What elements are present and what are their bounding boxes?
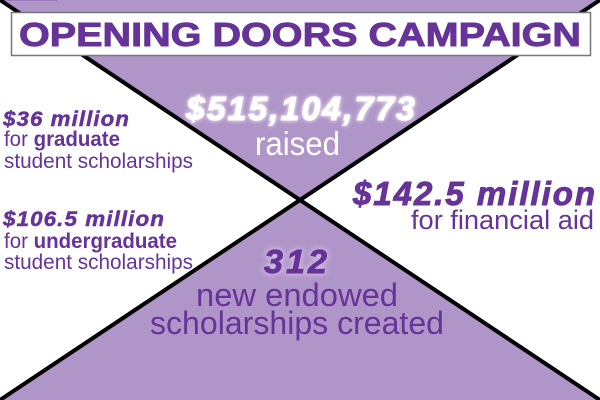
endowed scholarships: scholarships created (150, 305, 444, 341)
panel: top triangle (0, 0, 600, 200)
endowed scholarships: new endowed (196, 277, 398, 313)
graduate scholarships: for graduate (4, 128, 120, 151)
undergraduate scholarships: for undergraduate (4, 230, 177, 253)
endowed scholarships (150, 243, 444, 341)
total raised (185, 90, 417, 162)
graduate scholarships: $36 million (2, 108, 130, 131)
undergraduate scholarships (2, 208, 193, 274)
undergraduate scholarships: $106.5 million (2, 208, 165, 231)
graduate scholarships (2, 108, 193, 173)
endowed scholarships: 312 (264, 243, 330, 280)
financial aid: for financial aid (411, 205, 594, 235)
total raised: $515,104,773 (185, 90, 417, 127)
panel: bottom triangle (0, 200, 600, 400)
undergraduate scholarships: student scholarships (4, 251, 193, 274)
title banner (12, 12, 590, 56)
graduate scholarships: student scholarships (4, 150, 193, 173)
top-left accent strip (0, 0, 57, 1)
financial aid: $142.5 million (352, 175, 597, 212)
financial aid (352, 175, 597, 235)
title banner: OPENING DOORS CAMPAIGN (19, 16, 581, 53)
total raised: raised (255, 125, 340, 162)
